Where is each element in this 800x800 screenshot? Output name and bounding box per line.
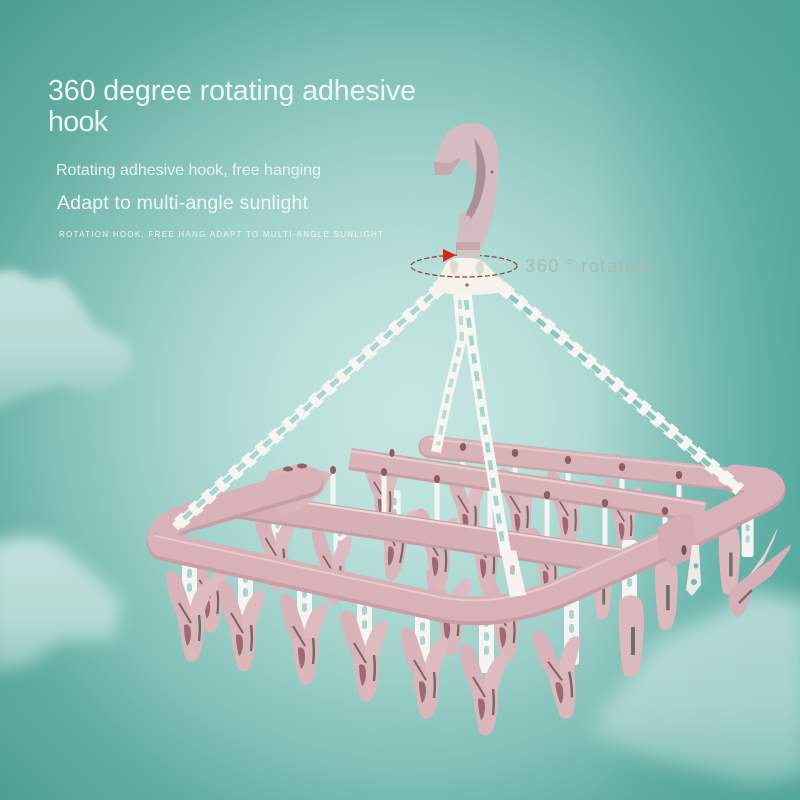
- frame highlight: [155, 536, 660, 600]
- subtitle: sunlight: Adapt to multi-angle sunlight: [57, 192, 309, 214]
- cloud: lower right: [590, 590, 800, 785]
- rotation ring: dashed ellipse: [411, 255, 517, 277]
- chain: right: [503, 288, 740, 490]
- rack: back bar: [430, 439, 745, 480]
- caption: small capitals: ROTATION HOOK, FREE HANG ADAPT TO MULTI-ANGLE SUNLIGHT: [59, 230, 383, 239]
- frame shadow edge: [160, 480, 772, 612]
- icon: swivel hook: [434, 123, 498, 255]
- front row clips: [166, 505, 754, 735]
- right hinge: [657, 512, 701, 596]
- title second line: hook: [48, 106, 109, 138]
- subtitle: rotating hook: Rotating adhesive hook, free hanging: [56, 162, 321, 179]
- back row clips: [188, 456, 642, 662]
- rack: middle bar: [350, 451, 705, 512]
- rack: bar holes: [330, 443, 682, 515]
- rack: outer frame: [155, 477, 772, 612]
- chain: centre back: [436, 292, 462, 452]
- chain: left: [175, 288, 440, 527]
- title: 360 degree rotating adhesive: [48, 75, 416, 107]
- rack: front inner bar: [240, 493, 625, 562]
- hook neck over ring: [457, 250, 480, 258]
- chain: centre front: [466, 292, 526, 597]
- hub: white rotating base: [433, 258, 507, 295]
- cloud: upper left: [0, 270, 132, 412]
- label: 360 rotation: 360 ° rotation: [525, 255, 652, 276]
- icon: red direction arrow: [443, 249, 456, 262]
- side clip opened at right: [729, 527, 791, 617]
- cloud: lower left: [0, 536, 122, 672]
- small white hanger loops: [333, 450, 679, 545]
- left hinge: [262, 463, 332, 515]
- frame main body: [160, 477, 772, 609]
